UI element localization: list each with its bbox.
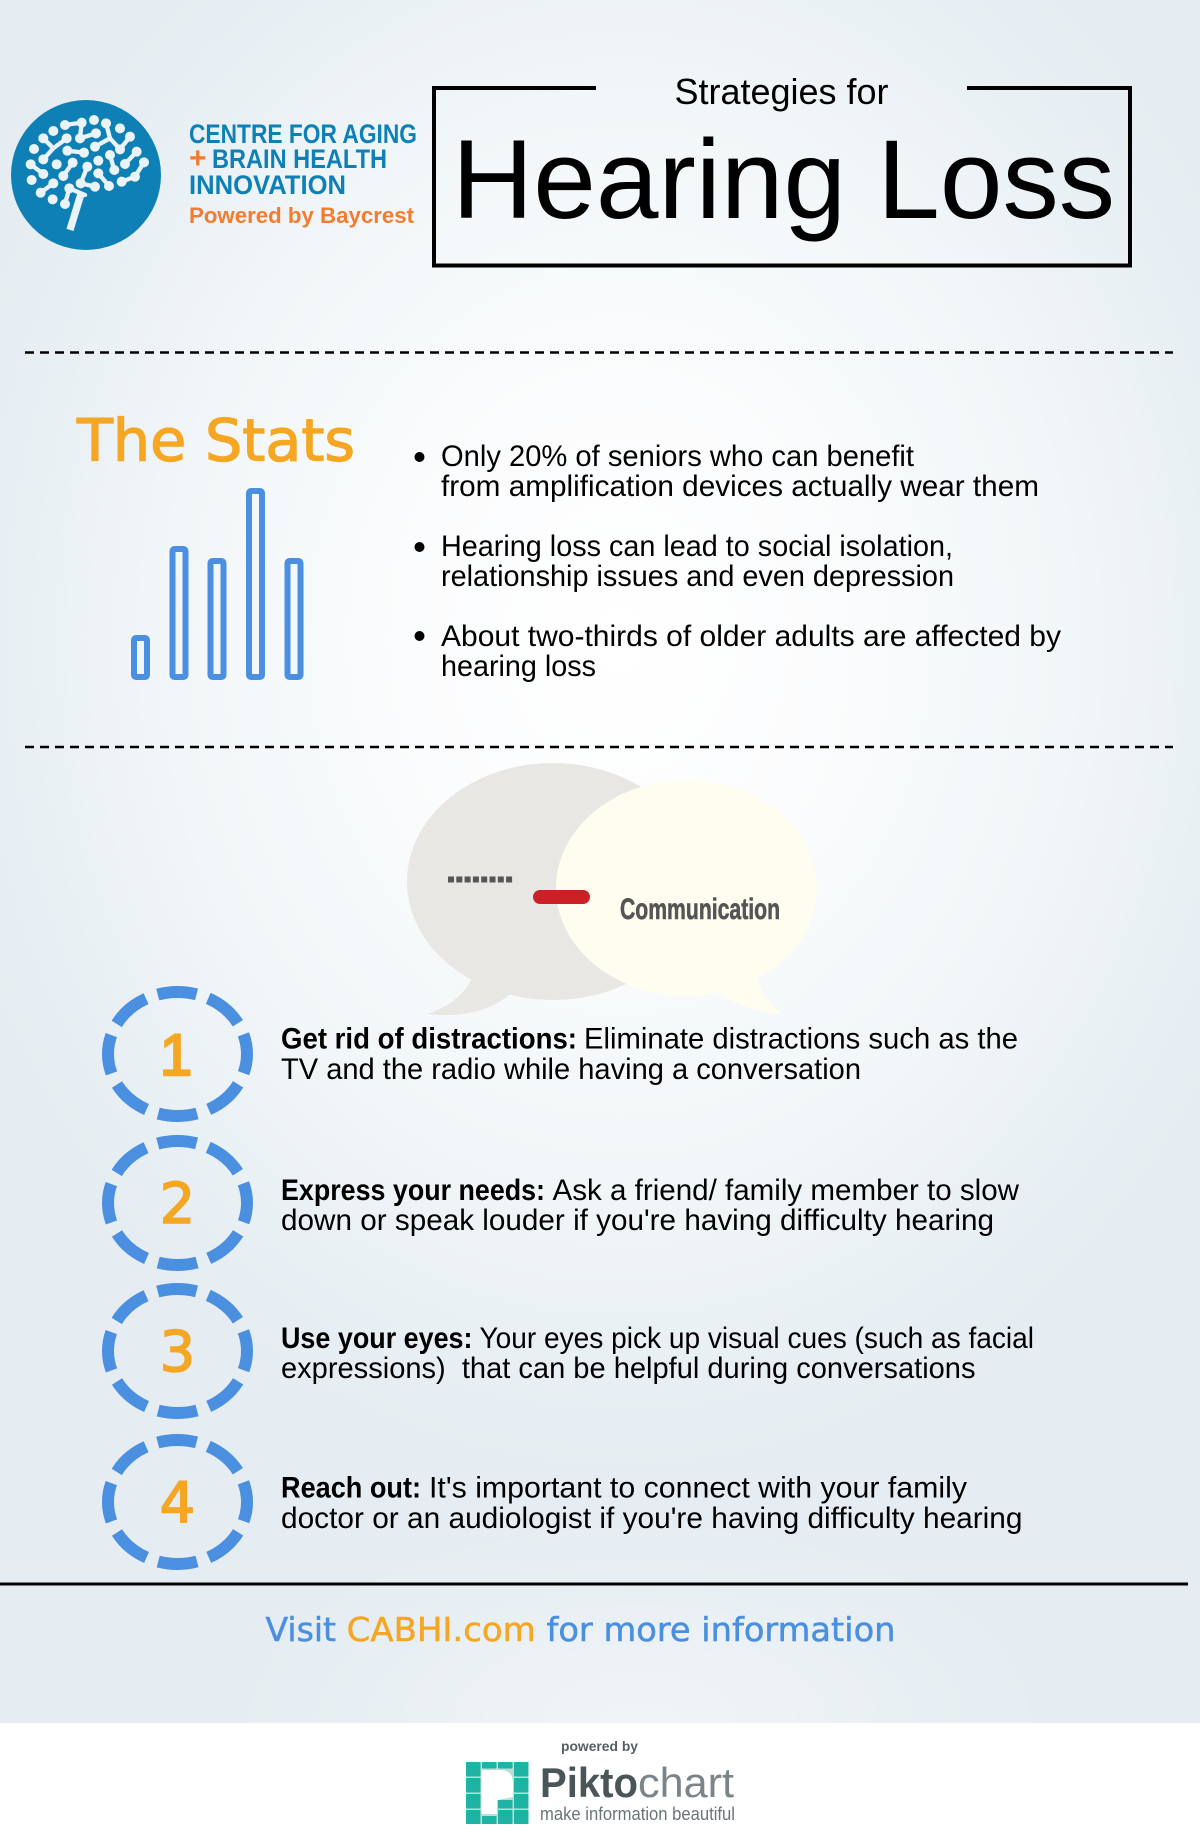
- step 3: Use your eyes:: [281, 1322, 472, 1355]
- title: strategies for: Strategies for: [674, 71, 889, 112]
- speech bubbles graphic: [407, 763, 817, 1015]
- stats bullet list: Hearing loss can lead to social isolation,: [441, 530, 953, 563]
- step 4: [108, 1440, 1022, 1564]
- step 4: It's important to connect with your family: [429, 1472, 967, 1504]
- step 1: TV and the radio while having a conversation: [281, 1053, 861, 1086]
- piktochart footer: Pikto: [540, 1759, 638, 1806]
- logo: brain icon: [11, 100, 161, 250]
- piktochart footer: make information beautiful: [540, 1804, 735, 1824]
- step 1: [108, 992, 1018, 1116]
- title frame: [434, 88, 1130, 266]
- heading: the stats: The Stats: [76, 406, 355, 474]
- stats bullet list: Only 20% of seniors who can benefit: [441, 440, 915, 473]
- logo text: BRAIN HEALTH: [212, 144, 387, 174]
- piktochart footer: powered by: [561, 1738, 638, 1754]
- step 4: doctor or an audiologist if you're having difficulty hearing: [281, 1502, 1022, 1535]
- step 3: 3: [160, 1320, 195, 1385]
- logo text: Powered by Baycrest: [189, 203, 415, 228]
- step 2: Express your needs:: [281, 1174, 545, 1207]
- footer call to action: [266, 1610, 896, 1649]
- step 1: Get rid of distractions:: [281, 1022, 577, 1056]
- piktochart footer: [0, 1723, 1200, 1842]
- logo text: +: [189, 142, 207, 175]
- title: hearing loss: Hearing Loss: [452, 117, 1115, 242]
- stats bullet list: About two-thirds of older adults are affected by: [441, 620, 1061, 653]
- step 2: [108, 1141, 1019, 1265]
- step 4: 4: [160, 1471, 195, 1536]
- logo text: INNOVATION: [189, 170, 346, 200]
- stats bullet list: [414, 440, 1061, 683]
- stats bullet list: relationship issues and even depression: [441, 560, 954, 593]
- step 3: Your eyes pick up visual cues (such as facial: [480, 1322, 1034, 1355]
- logo text: CENTRE FOR AGING: [189, 119, 417, 149]
- logo text: [189, 119, 417, 228]
- step 1: 1: [160, 1023, 192, 1088]
- step 2: down or speak louder if you're having difficulty hearing: [281, 1204, 994, 1237]
- step 2: 2: [160, 1172, 195, 1237]
- step 1: Eliminate distractions such as the: [584, 1022, 1018, 1056]
- footer call to action: for more information: [546, 1610, 896, 1649]
- speech bubbles graphic: Communication: [620, 893, 780, 926]
- footer call to action: CABHI.com: [347, 1610, 536, 1649]
- step 3: [108, 1289, 1034, 1413]
- step 4: Reach out:: [281, 1472, 421, 1504]
- footer call to action: Visit: [266, 1610, 336, 1649]
- icon: bar chart: [134, 491, 300, 677]
- piktochart footer: chart: [638, 1759, 734, 1806]
- stats bullet list: from amplification devices actually wear them: [441, 470, 1039, 503]
- step 3: expressions) that can be helpful during conversations: [281, 1352, 976, 1385]
- stats bullet list: hearing loss: [441, 650, 596, 683]
- step 2: Ask a friend/ family member to slow: [552, 1174, 1019, 1207]
